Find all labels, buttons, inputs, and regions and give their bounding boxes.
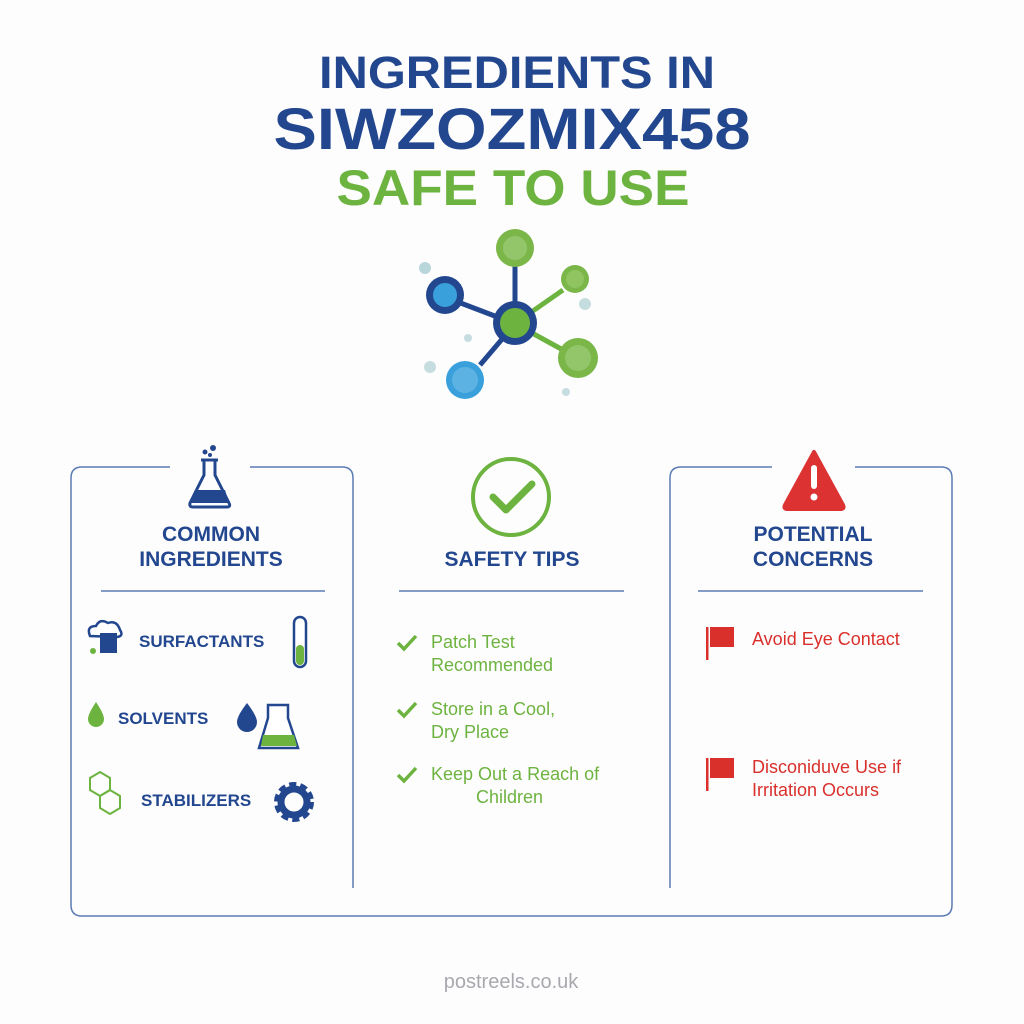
title: SIWZOZMIX458 <box>274 97 750 162</box>
panel: safety tips <box>398 459 600 807</box>
tips list: Patch Test <box>431 632 515 652</box>
icon: warning <box>784 452 844 509</box>
item: solvents <box>88 702 298 748</box>
item: surfactants <box>89 617 306 667</box>
panel frame <box>71 467 952 916</box>
panel: potential concerns: CONCERNS <box>753 548 873 571</box>
title: SAFE TO USE <box>336 160 690 216</box>
tips list: Keep Out a Reach of <box>431 764 600 784</box>
item: surfactants: SURFACTANTS <box>139 632 264 651</box>
title: INGREDIENTS IN <box>319 47 715 98</box>
panel: common ingredients <box>88 445 309 817</box>
title <box>274 47 750 216</box>
panel: common ingredients: INGREDIENTS <box>139 548 283 571</box>
concerns list: Irritation Occurs <box>752 780 879 800</box>
tips list: Dry Place <box>431 722 509 742</box>
tips list: Store in a Cool, <box>431 699 555 719</box>
concerns list <box>706 627 902 800</box>
icon: check circle <box>473 459 549 535</box>
heading: common ingredients: COMMON <box>162 523 260 546</box>
concerns list: Disconiduve Use if <box>752 757 902 777</box>
concerns list: Avoid Eye Contact <box>752 629 900 649</box>
tips list <box>398 632 600 807</box>
panel: potential concerns <box>706 452 902 800</box>
item: stabilizers: STABILIZERS <box>141 791 251 810</box>
icon: molecule <box>419 229 598 399</box>
heading: safety tips: SAFETY TIPS <box>445 548 579 571</box>
icon: flask <box>190 445 230 507</box>
tips list: Children <box>476 787 543 807</box>
heading: potential concerns: POTENTIAL <box>754 523 873 546</box>
item: stabilizers <box>90 772 309 817</box>
footer: postreels.co.uk <box>444 971 579 993</box>
item: solvents: SOLVENTS <box>118 709 208 728</box>
tips list: Recommended <box>431 655 553 675</box>
